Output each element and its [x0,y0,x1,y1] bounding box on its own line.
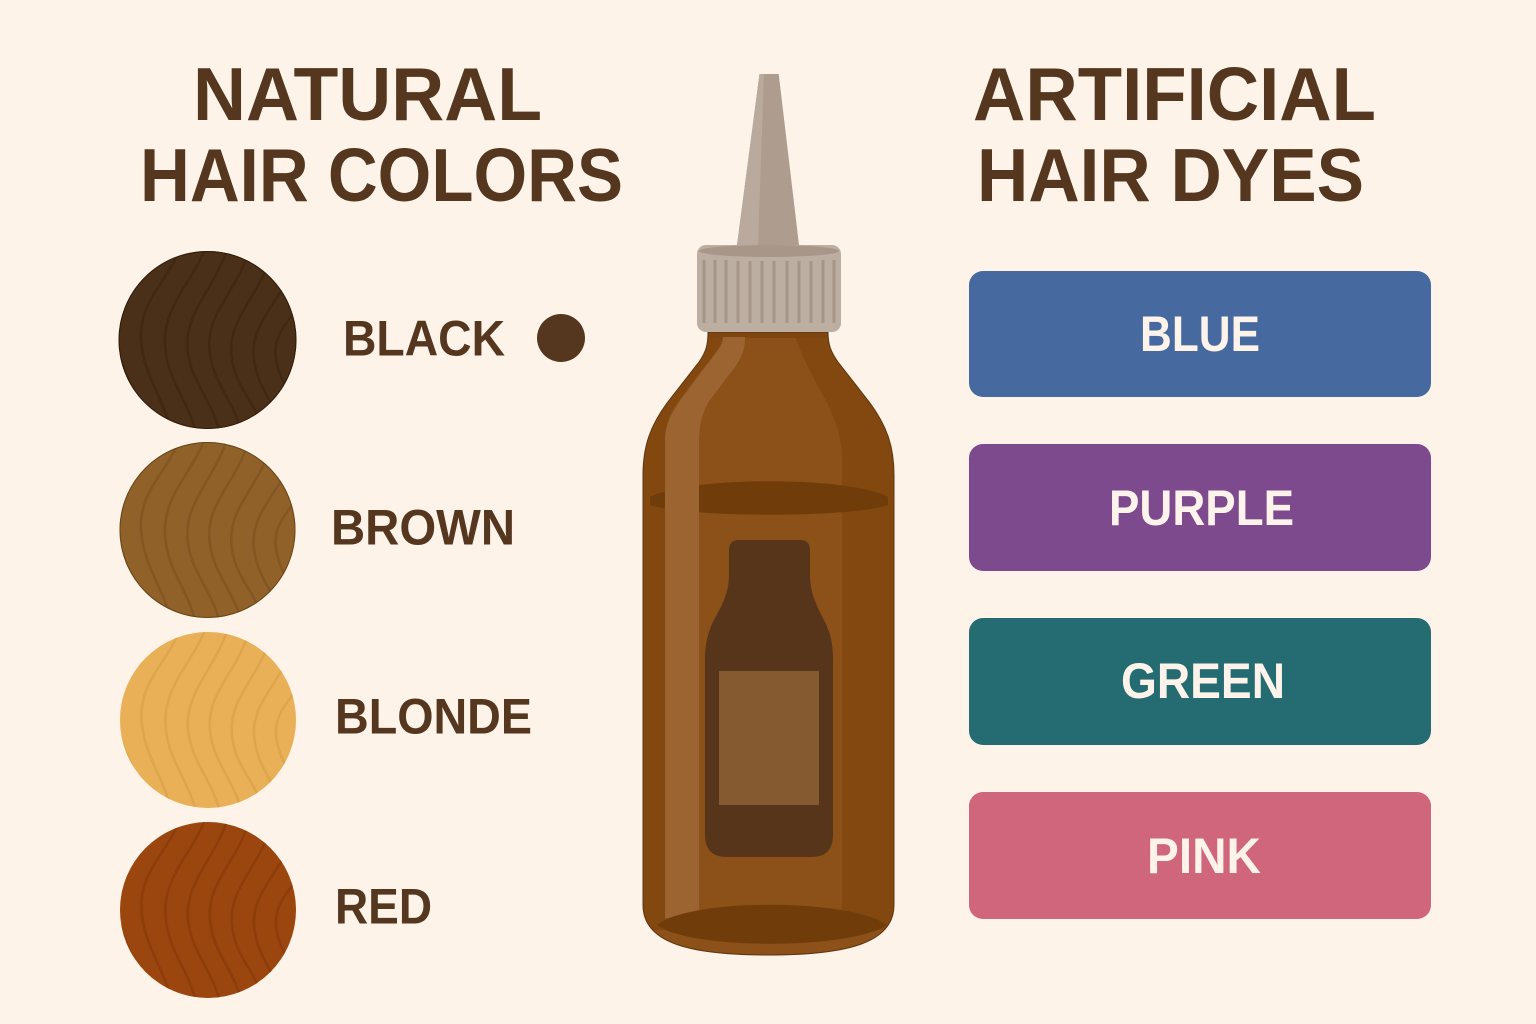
label: black: BLACK [343,310,505,366]
bottle nozzle [737,74,799,245]
panel: blue [969,271,1431,397]
swatch: red hair [120,822,296,998]
panel: pink: PINK [1147,828,1261,884]
bottle highlight [665,337,745,918]
heading: natural hair colors: NATURAL [193,52,542,136]
icon: black dot [537,314,585,362]
panel: blue: BLUE [1140,306,1260,362]
panel: green: GREEN [1121,653,1285,709]
inner bottle label [719,671,819,805]
heading: artificial hair dyes: HAIR DYES [977,133,1364,217]
swatch: brown hair [120,442,296,618]
panel: purple: PURPLE [1109,480,1294,536]
swatch: black hair [118,251,296,429]
right shaded band [795,335,900,930]
panel: green [969,618,1431,745]
inner bottle silhouette [705,540,833,857]
label: blonde: BLONDE [335,688,532,744]
bottle cap [697,245,841,332]
neck shading [714,332,828,338]
outer wall tone [640,330,723,930]
heading: natural hair colors [140,52,623,217]
label: brown: BROWN [331,500,515,556]
panel: purple [969,444,1431,571]
bottle outline [643,332,894,955]
heading: artificial hair dyes: ARTIFICIAL [973,52,1376,136]
bottom thickness [657,905,887,944]
bottle illustration [640,74,900,960]
label: red: RED [335,878,432,934]
panel: pink [969,792,1431,919]
swatch: blonde hair [120,632,296,808]
bottle body [640,330,900,960]
heading: artificial hair dyes [973,52,1376,217]
liquid level band [650,481,888,515]
heading: natural hair colors: HAIR COLORS [140,133,623,217]
